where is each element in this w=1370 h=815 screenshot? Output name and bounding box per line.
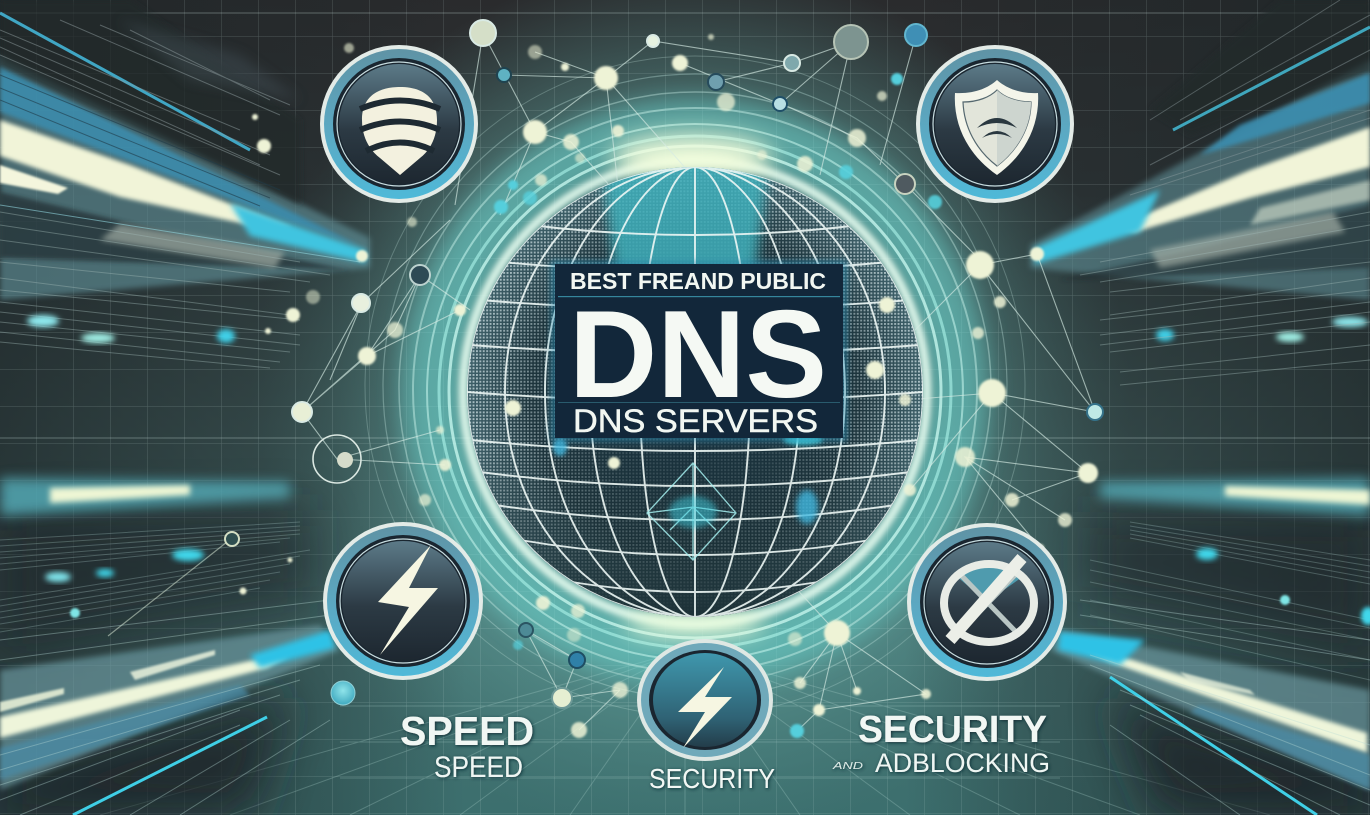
title: DNS servers: DNS SERVERS bbox=[573, 403, 818, 439]
light pulses bbox=[27, 315, 1368, 343]
label: security and adblocking: SECURITY bbox=[858, 709, 1047, 751]
label: speed bbox=[400, 708, 534, 784]
speed streaks: middle right bbox=[1090, 478, 1370, 680]
icon: striped signal badge bbox=[320, 45, 478, 203]
label: adblocking: ADBLOCKING bbox=[875, 748, 1050, 778]
speed streaks: upper left bbox=[0, 0, 370, 368]
network nodes bbox=[240, 20, 1103, 738]
network connections bbox=[302, 33, 1095, 731]
shield bbox=[955, 80, 1038, 175]
globe meridians and parallels bbox=[467, 167, 923, 617]
globe bbox=[467, 150, 923, 617]
cyan orb bbox=[331, 681, 355, 705]
speed streaks: middle left bbox=[0, 478, 310, 650]
icon: shield badge bbox=[916, 45, 1074, 203]
label: speed: SPEED bbox=[400, 708, 534, 754]
icon: lightning badge, speed bbox=[323, 522, 483, 680]
label: security and adblocking bbox=[832, 709, 1050, 778]
speed streaks: lower right bbox=[1050, 600, 1370, 815]
signal stripes bbox=[360, 87, 440, 175]
lightning bolt bbox=[678, 667, 732, 748]
speed streaks: lower left bbox=[0, 600, 340, 815]
globe crystal bbox=[647, 463, 736, 560]
floor grid bbox=[100, 650, 1270, 815]
icon: lightning badge, security bbox=[637, 639, 773, 761]
title: line one: BEST FREAND PUBLIC bbox=[570, 268, 826, 294]
label: security centre: SECURITY bbox=[649, 763, 775, 794]
label: and: AND bbox=[832, 761, 863, 772]
prohibition mark bbox=[944, 558, 1034, 642]
speed streaks: upper right bbox=[1030, 0, 1370, 385]
icon: no-ads badge bbox=[907, 523, 1067, 681]
glowing rings bbox=[365, 56, 1025, 716]
lightning bolt bbox=[378, 545, 438, 655]
title panel bbox=[550, 260, 848, 442]
title: DNS: DNS bbox=[569, 286, 827, 424]
label: speed secondary: SPEED bbox=[434, 751, 523, 784]
